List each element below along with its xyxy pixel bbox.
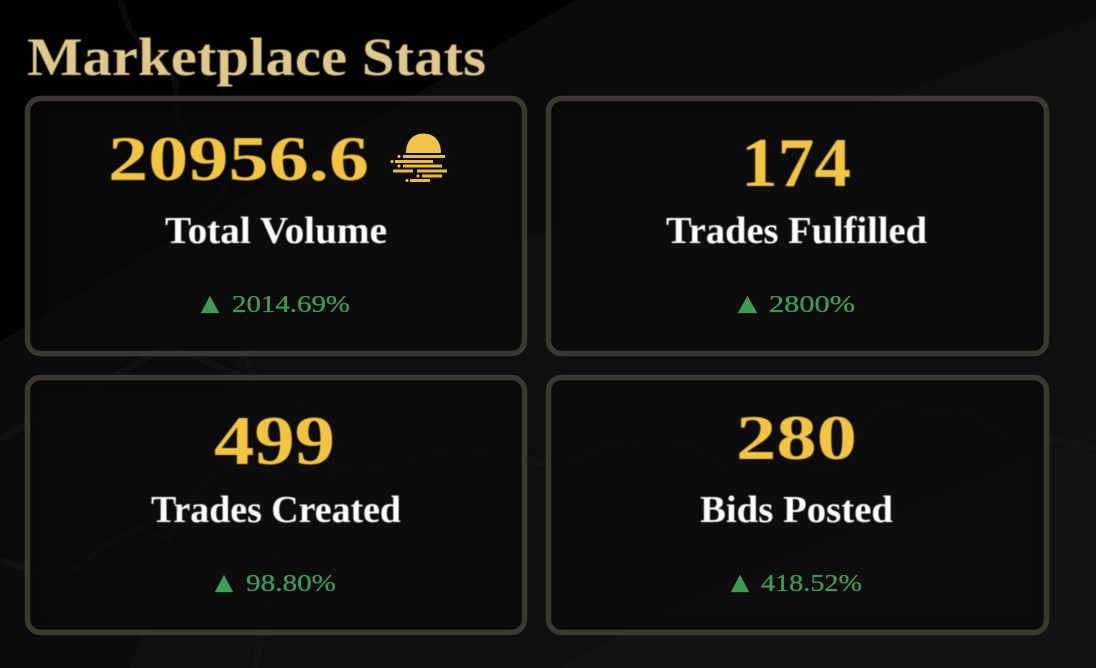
change: total volume: 2014.69% <box>232 292 350 318</box>
value: trades fulfilled: 174 <box>741 125 851 202</box>
change: bids posted <box>731 571 862 597</box>
label: total volume: Total Volume <box>165 210 387 252</box>
value: total volume: 20956.6 <box>108 124 369 194</box>
label: trades created: Trades Created <box>151 489 401 531</box>
change: trades fulfilled: 2800% <box>769 292 855 318</box>
change: trades fulfilled <box>738 292 855 318</box>
change: total volume <box>201 292 350 318</box>
value: bids posted: 280 <box>736 403 857 473</box>
label: bids posted: Bids Posted <box>700 489 893 531</box>
change: bids posted: 418.52% <box>761 571 862 597</box>
change: trades created: 98.80% <box>246 571 336 597</box>
value: trades created: 499 <box>214 403 335 480</box>
panel: total volume <box>22 93 530 359</box>
change: trades created <box>215 571 336 597</box>
panel: trades created <box>22 372 530 638</box>
label: trades fulfilled: Trades Fulfilled <box>666 210 927 252</box>
panel: bids posted <box>543 372 1052 638</box>
title: Marketplace Stats <box>27 27 486 87</box>
icon: moon token <box>390 134 447 182</box>
panel: trades fulfilled <box>543 93 1052 359</box>
